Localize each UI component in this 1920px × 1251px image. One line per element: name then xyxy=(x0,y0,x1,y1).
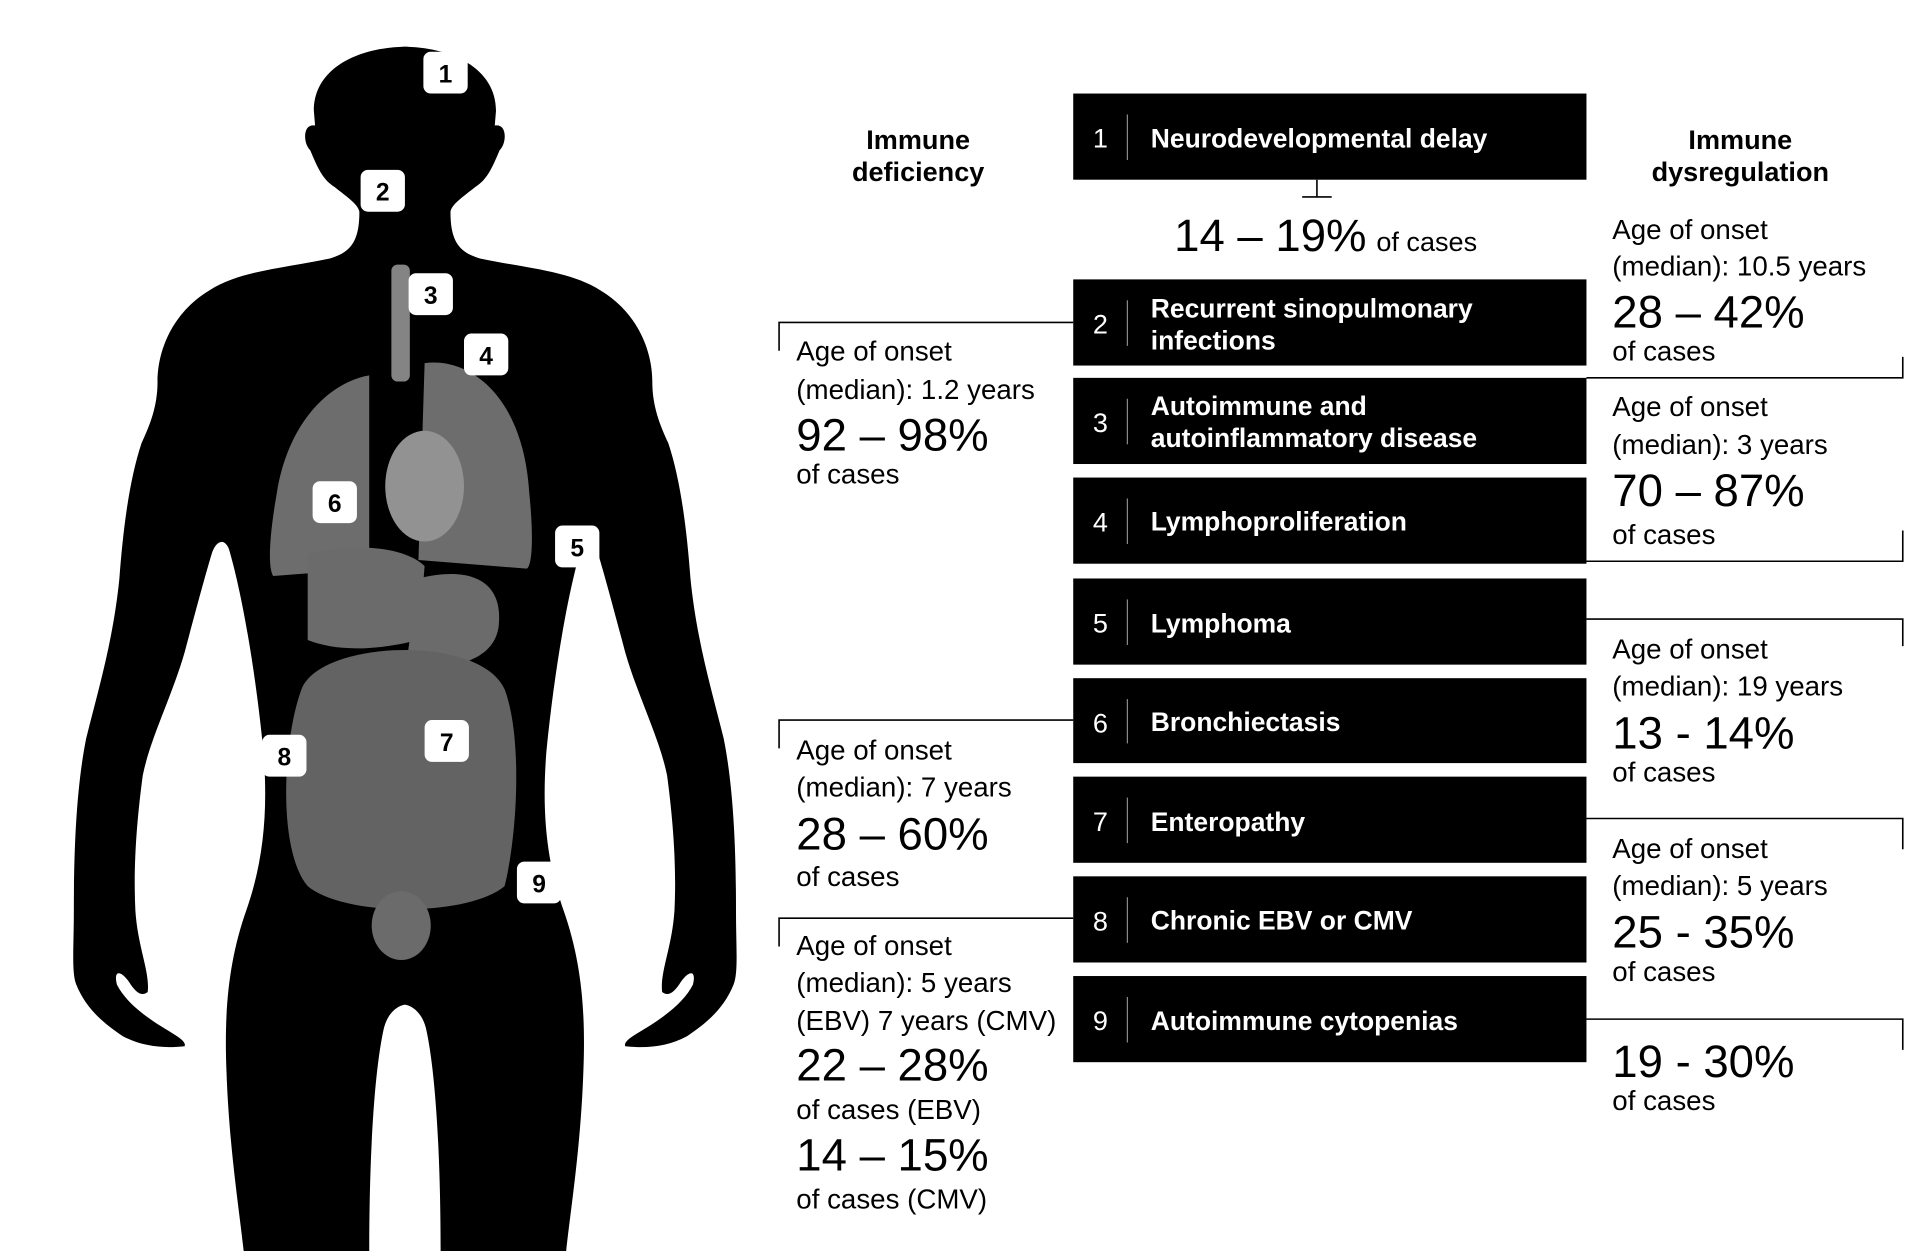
condition boxes: autoinflammatory disease xyxy=(1151,423,1477,453)
badge numbers: 7 xyxy=(440,730,454,757)
left stat: bronchiectasis: of cases xyxy=(796,861,899,892)
badge numbers xyxy=(262,52,599,903)
condition boxes: 4 xyxy=(1093,507,1108,538)
intestines xyxy=(286,650,516,909)
stat: neurodevelopmental: 14 – 19% of cases xyxy=(1174,210,1477,261)
condition boxes: 9 xyxy=(1093,1005,1108,1036)
right stat: cytopenias: 19 - 30% xyxy=(1612,1036,1794,1087)
badge numbers: 2 xyxy=(376,180,390,207)
right stat: lymphoma: (median): 19 years xyxy=(1612,670,1843,701)
body silhouette xyxy=(73,47,737,1251)
right lung xyxy=(418,362,532,569)
condition boxes: 3 xyxy=(1093,407,1108,438)
left stat: EBV/CMV: Age of onset xyxy=(796,930,952,961)
condition boxes: Autoimmune cytopenias xyxy=(1151,1006,1458,1036)
condition boxes: infections xyxy=(1151,326,1276,356)
condition boxes: Autoimmune and xyxy=(1151,391,1367,421)
condition boxes xyxy=(1073,94,1586,1062)
heading: immune dysregulation: dysregulation xyxy=(1652,156,1829,187)
left stat: EBV/CMV: (EBV) 7 years (CMV) xyxy=(796,1005,1056,1036)
left stat: sinopulmonary xyxy=(779,322,1073,490)
left stat: EBV/CMV: of cases (EBV) xyxy=(796,1094,981,1125)
stomach xyxy=(406,574,499,667)
left lung xyxy=(270,375,369,576)
right stat: enteropathy xyxy=(1586,818,1903,987)
left stat: bronchiectasis: 28 – 60% xyxy=(796,808,989,859)
condition boxes: Lymphoproliferation xyxy=(1151,506,1407,536)
badge numbers: 6 xyxy=(328,491,342,518)
heading: immune dysregulation: Immune xyxy=(1688,124,1792,155)
right stat: cytopenias xyxy=(1586,1019,1903,1116)
left stat: EBV/CMV: 14 – 15% xyxy=(796,1130,989,1181)
condition boxes: Lymphoma xyxy=(1151,609,1291,639)
left stat: EBV/CMV: of cases (CMV) xyxy=(796,1184,987,1215)
badge numbers: 5 xyxy=(570,535,584,562)
right stat: sinopulmonary: 28 – 42% xyxy=(1612,286,1805,337)
condition boxes: Bronchiectasis xyxy=(1151,707,1340,737)
condition boxes: 5 xyxy=(1093,608,1108,639)
right stat: sinopulmonary: of cases xyxy=(1612,336,1715,367)
organs xyxy=(270,265,532,960)
right stat: sinopulmonary: (median): 10.5 years xyxy=(1612,251,1866,282)
left stat: sinopulmonary: (median): 1.2 years xyxy=(796,374,1035,405)
heading: immune deficiency: deficiency xyxy=(852,156,984,187)
right stat: autoimmune: Age of onset xyxy=(1612,391,1768,422)
left stat: sinopulmonary: of cases xyxy=(796,459,899,490)
right stat: enteropathy: (median): 5 years xyxy=(1612,870,1828,901)
right stat: autoimmune: 70 – 87% xyxy=(1612,465,1805,516)
condition boxes: Neurodevelopmental delay xyxy=(1151,124,1488,154)
badge numbers: 1 xyxy=(439,61,452,88)
right stat: sinopulmonary xyxy=(1586,214,1903,378)
right stat: lymphoma: Age of onset xyxy=(1612,633,1768,664)
condition boxes: Chronic EBV or CMV xyxy=(1151,905,1413,935)
heading: immune deficiency: Immune xyxy=(866,124,970,155)
condition boxes: Enteropathy xyxy=(1151,807,1305,837)
right stat: enteropathy: Age of onset xyxy=(1612,833,1768,864)
condition boxes: 1 xyxy=(1093,123,1108,154)
badge numbers: 8 xyxy=(277,745,291,772)
badge numbers: 4 xyxy=(479,343,493,370)
condition boxes: 6 xyxy=(1093,707,1108,738)
stat: neurodevelopmental xyxy=(1174,180,1477,261)
right stat: autoimmune xyxy=(1586,391,1903,561)
heart xyxy=(385,431,464,542)
badge numbers: 9 xyxy=(532,871,546,898)
left stat: sinopulmonary: 92 – 98% xyxy=(796,409,989,460)
bladder xyxy=(372,891,431,960)
right stat: enteropathy: 25 - 35% xyxy=(1612,907,1794,958)
right stat: lymphoma: 13 - 14% xyxy=(1612,707,1794,758)
liver xyxy=(308,547,425,648)
left stat: sinopulmonary: Age of onset xyxy=(796,336,952,367)
condition boxes: 8 xyxy=(1093,905,1108,936)
condition boxes: 7 xyxy=(1093,806,1108,837)
left stat: EBV/CMV: (median): 5 years xyxy=(796,967,1012,998)
right stat: sinopulmonary: Age of onset xyxy=(1612,214,1768,245)
right stat: autoimmune: of cases xyxy=(1612,519,1715,550)
trachea xyxy=(391,265,410,382)
right stat: cytopenias: of cases xyxy=(1612,1085,1715,1116)
right stat: lymphoma: of cases xyxy=(1612,757,1715,788)
right stat: enteropathy: of cases xyxy=(1612,956,1715,987)
left stat: bronchiectasis xyxy=(779,720,1073,892)
condition boxes: Recurrent sinopulmonary xyxy=(1151,294,1473,324)
badge numbers: 3 xyxy=(424,283,438,310)
left stat: bronchiectasis: Age of onset xyxy=(796,734,952,765)
left stat: EBV/CMV xyxy=(779,918,1073,1215)
condition boxes: 2 xyxy=(1093,309,1108,340)
left stat: EBV/CMV: 22 – 28% xyxy=(796,1040,989,1091)
left stat: bronchiectasis: (median): 7 years xyxy=(796,771,1012,802)
right stat: autoimmune: (median): 3 years xyxy=(1612,429,1828,460)
right stat: lymphoma xyxy=(1586,619,1903,788)
